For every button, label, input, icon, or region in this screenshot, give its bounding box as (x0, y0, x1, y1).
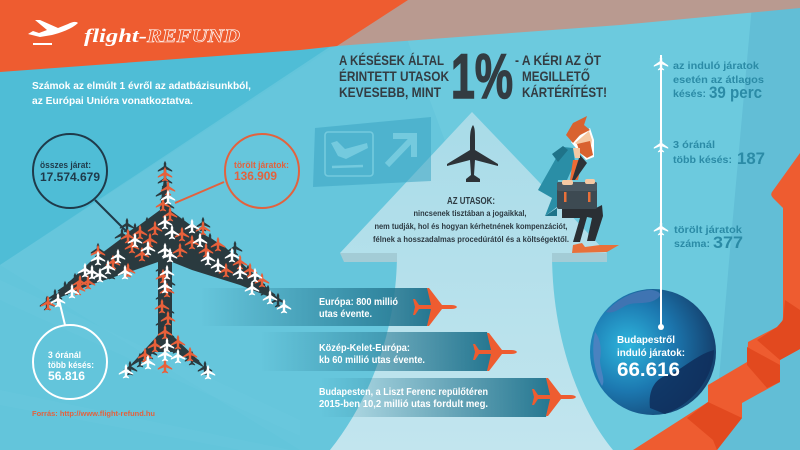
stat circle: all flights: összes járat: (40, 160, 91, 170)
coat (538, 147, 575, 216)
mosaic: silhouette base (47, 170, 282, 368)
top band: orange (0, 0, 408, 72)
stat: average delay: 39 perc (709, 83, 762, 102)
banner: Europe: Európa: 800 millió (319, 297, 398, 308)
banner: Europe: utas évente. (319, 309, 372, 320)
stat: average delay (673, 60, 764, 102)
stat: average delay: az induló járatok (673, 60, 759, 72)
icon: sign plane (331, 141, 368, 159)
face (575, 131, 592, 146)
stat: delay over 3 hours: több késés: (673, 154, 732, 166)
headline: ÉRINTETT UTASOK (339, 68, 449, 84)
headline: KÁRTÉRÍTÉST! (522, 84, 607, 100)
logo wordmark (84, 26, 240, 47)
headline: MEGILLETŐ (522, 67, 590, 84)
banner: Budapest: Budapesten, a Liszt Ferenc repülőtéren (319, 387, 488, 398)
stat: cancelled: 377 (713, 233, 743, 252)
logo (28, 20, 240, 47)
banner: Central-Eastern Europe (260, 332, 517, 371)
stat: average delay: késés: (673, 88, 706, 100)
hands on briefcase (562, 179, 595, 185)
globe text: Budapestről (617, 335, 675, 346)
passengers text: nincsenek tisztában a jogaikkal, (414, 208, 526, 218)
banner: Europe (200, 288, 457, 326)
big percentage: 1% (451, 42, 513, 112)
head outline (571, 128, 594, 160)
stat: delay over 3 hours (673, 139, 765, 168)
headline: A KÉSÉSEK ÁLTAL (339, 52, 444, 68)
connector lines (59, 182, 224, 325)
stat: delay over 3 hours: 3 óránál (673, 139, 715, 151)
banner: Central-Eastern Europe: Közép-Kelet-Európa: (319, 343, 410, 354)
intro text: az Európai Unióra vonatkoztatva. (32, 95, 193, 107)
banners (200, 288, 576, 417)
stat circle: cancelled flights (225, 134, 299, 208)
icon: timeline plane 3 (654, 221, 668, 235)
shirt (570, 160, 582, 180)
continents (606, 290, 660, 313)
icon: timeline plane 2 (654, 138, 668, 152)
icon: sign frame (325, 132, 373, 176)
big arrow (330, 112, 613, 450)
icon: logo plane (28, 20, 78, 45)
logo wordmark: flight- (84, 26, 147, 47)
stat circle: over 3 hours delay: több késés: (48, 360, 94, 370)
passengers text (373, 195, 569, 244)
passengers text: nem tudják, hol és hogyan kérhetnének kompenzációt, (374, 221, 568, 231)
source: Forrás: http://www.flight-refund.hu (32, 409, 155, 418)
hair (566, 116, 590, 143)
stat: cancelled: száma: (674, 238, 710, 250)
stat: cancelled: törölt járatok (674, 224, 742, 236)
shoes (572, 243, 619, 253)
passengers text: félnek a hosszadalmas procedúrától és a költségektől. (373, 234, 569, 244)
man sitting with briefcase (538, 116, 619, 253)
stat circle: all flights (33, 134, 107, 208)
top band: taupe (300, 0, 800, 50)
stat: delay over 3 hours: 187 (737, 149, 765, 168)
mosaic: white planes (51, 190, 291, 379)
globe text (617, 335, 685, 381)
plane mosaic (40, 161, 291, 379)
stat circle: cancelled flights: 136.909 (234, 169, 277, 183)
logo wordmark: REFUND (146, 26, 240, 47)
stat circle: over 3 hours delay: 3 óránál (48, 350, 81, 360)
orange stairs arrow (633, 153, 800, 450)
stat: cancelled (674, 224, 743, 252)
banner: Budapest (319, 378, 576, 417)
stat circle: over 3 hours delay (33, 325, 107, 399)
globe text: induló járatok: (617, 348, 685, 359)
stat circle: cancelled flights: törölt járatok: (234, 160, 289, 170)
globe text: 66.616 (617, 360, 680, 381)
icon: dark plane (447, 125, 498, 182)
intro text (32, 80, 251, 107)
passengers text: AZ UTASOK: (447, 195, 495, 207)
legs (562, 205, 603, 242)
beard (577, 141, 593, 158)
briefcase (557, 182, 597, 209)
mosaic: orange planes (41, 167, 269, 373)
icon: sign arrow (387, 136, 414, 165)
mosaic: dark planes (40, 161, 285, 375)
stat: average delay: esetén az átlagos (673, 74, 764, 86)
timeline (654, 55, 668, 330)
banner: Central-Eastern Europe: kb 60 millió utas évente. (319, 355, 425, 366)
headline: - A KÉRI AZ ÖT (515, 52, 601, 68)
headline: KEVESEBB, MINT (339, 84, 441, 100)
banner: Budapest: 2015-ben 10,2 millió utas fordult meg. (319, 399, 488, 410)
intro text: Számok az elmúlt 1 évről az adatbázisunkból, (32, 80, 251, 92)
stat circle: over 3 hours delay: 56.816 (48, 369, 85, 383)
icon: timeline plane 1 (654, 56, 668, 70)
globe (590, 289, 716, 415)
stat circle: all flights: 17.574.679 (40, 170, 100, 184)
headline (339, 42, 607, 112)
hand on face (573, 148, 580, 158)
departure sign (313, 117, 431, 187)
